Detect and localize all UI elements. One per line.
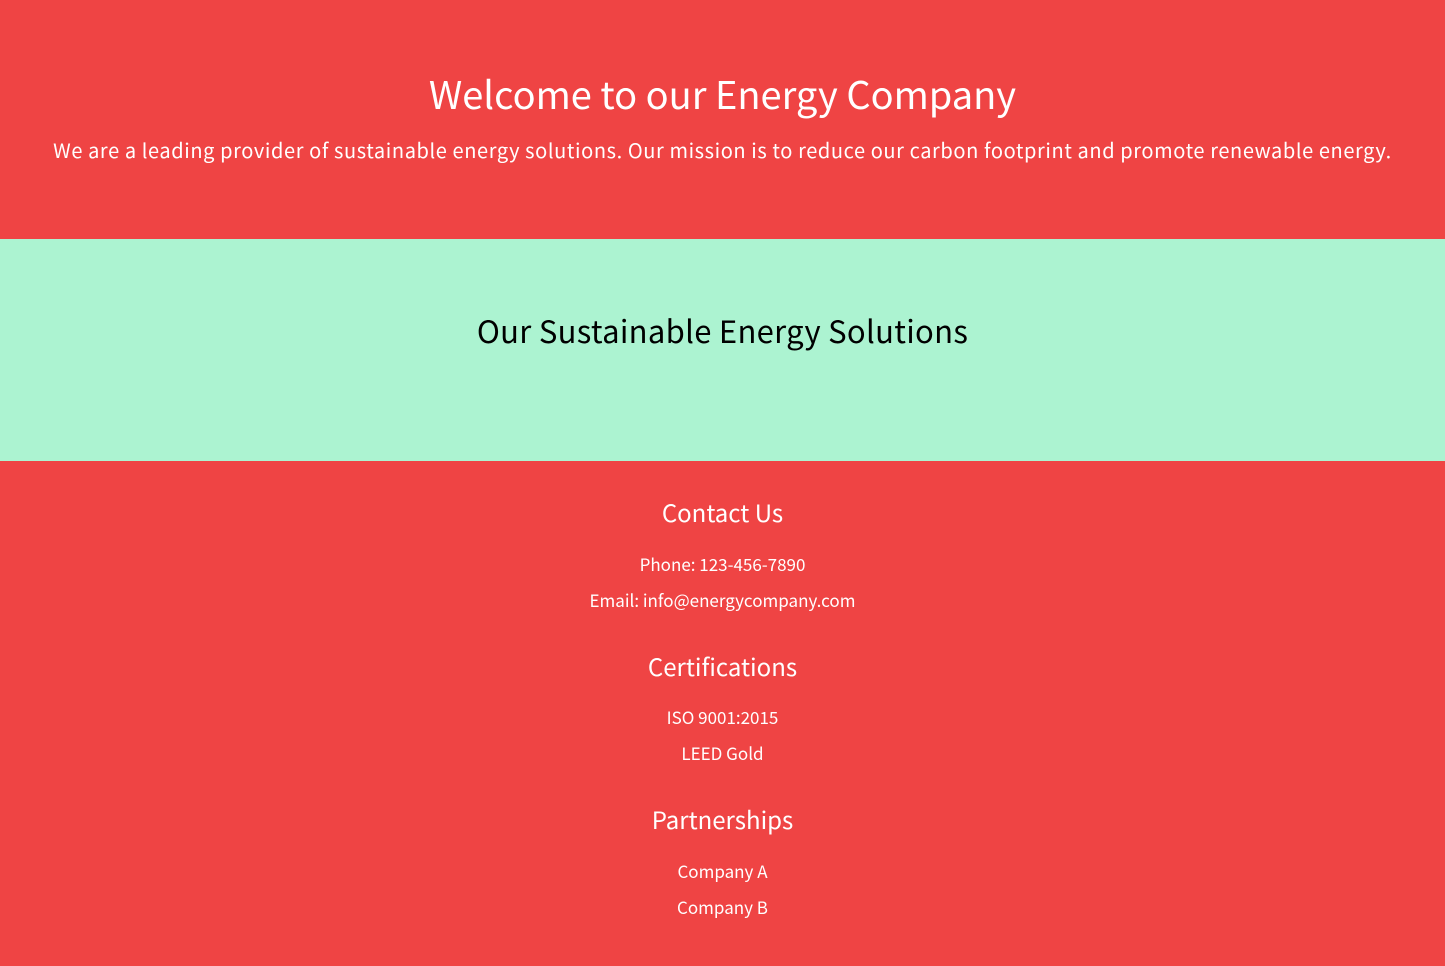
footer — [0, 461, 1445, 966]
cert 2: LEED Gold — [681, 740, 764, 765]
solutions heading: Our Sustainable Energy Solutions — [477, 307, 968, 352]
subtitle: We are a leading provider of sustainable energy solutions. Our mission is to reduce our carbon footprint and promote renewable energy. — [53, 135, 1392, 164]
panel: solutions — [0, 239, 1445, 461]
partner 1: Company A — [677, 858, 768, 883]
title: Welcome to our Energy Company — [429, 65, 1016, 120]
contact phone: Phone: 123-456-7890 — [640, 551, 805, 576]
contact email: Email: info@energycompany.com — [590, 587, 855, 612]
cert 1: ISO 9001:2015 — [667, 704, 778, 729]
partner 2: Company B — [677, 894, 768, 919]
partnerships heading: Partnerships — [652, 801, 793, 836]
certifications heading: Certifications — [648, 648, 797, 683]
contact heading: Contact Us — [662, 494, 783, 529]
header — [0, 0, 1445, 239]
